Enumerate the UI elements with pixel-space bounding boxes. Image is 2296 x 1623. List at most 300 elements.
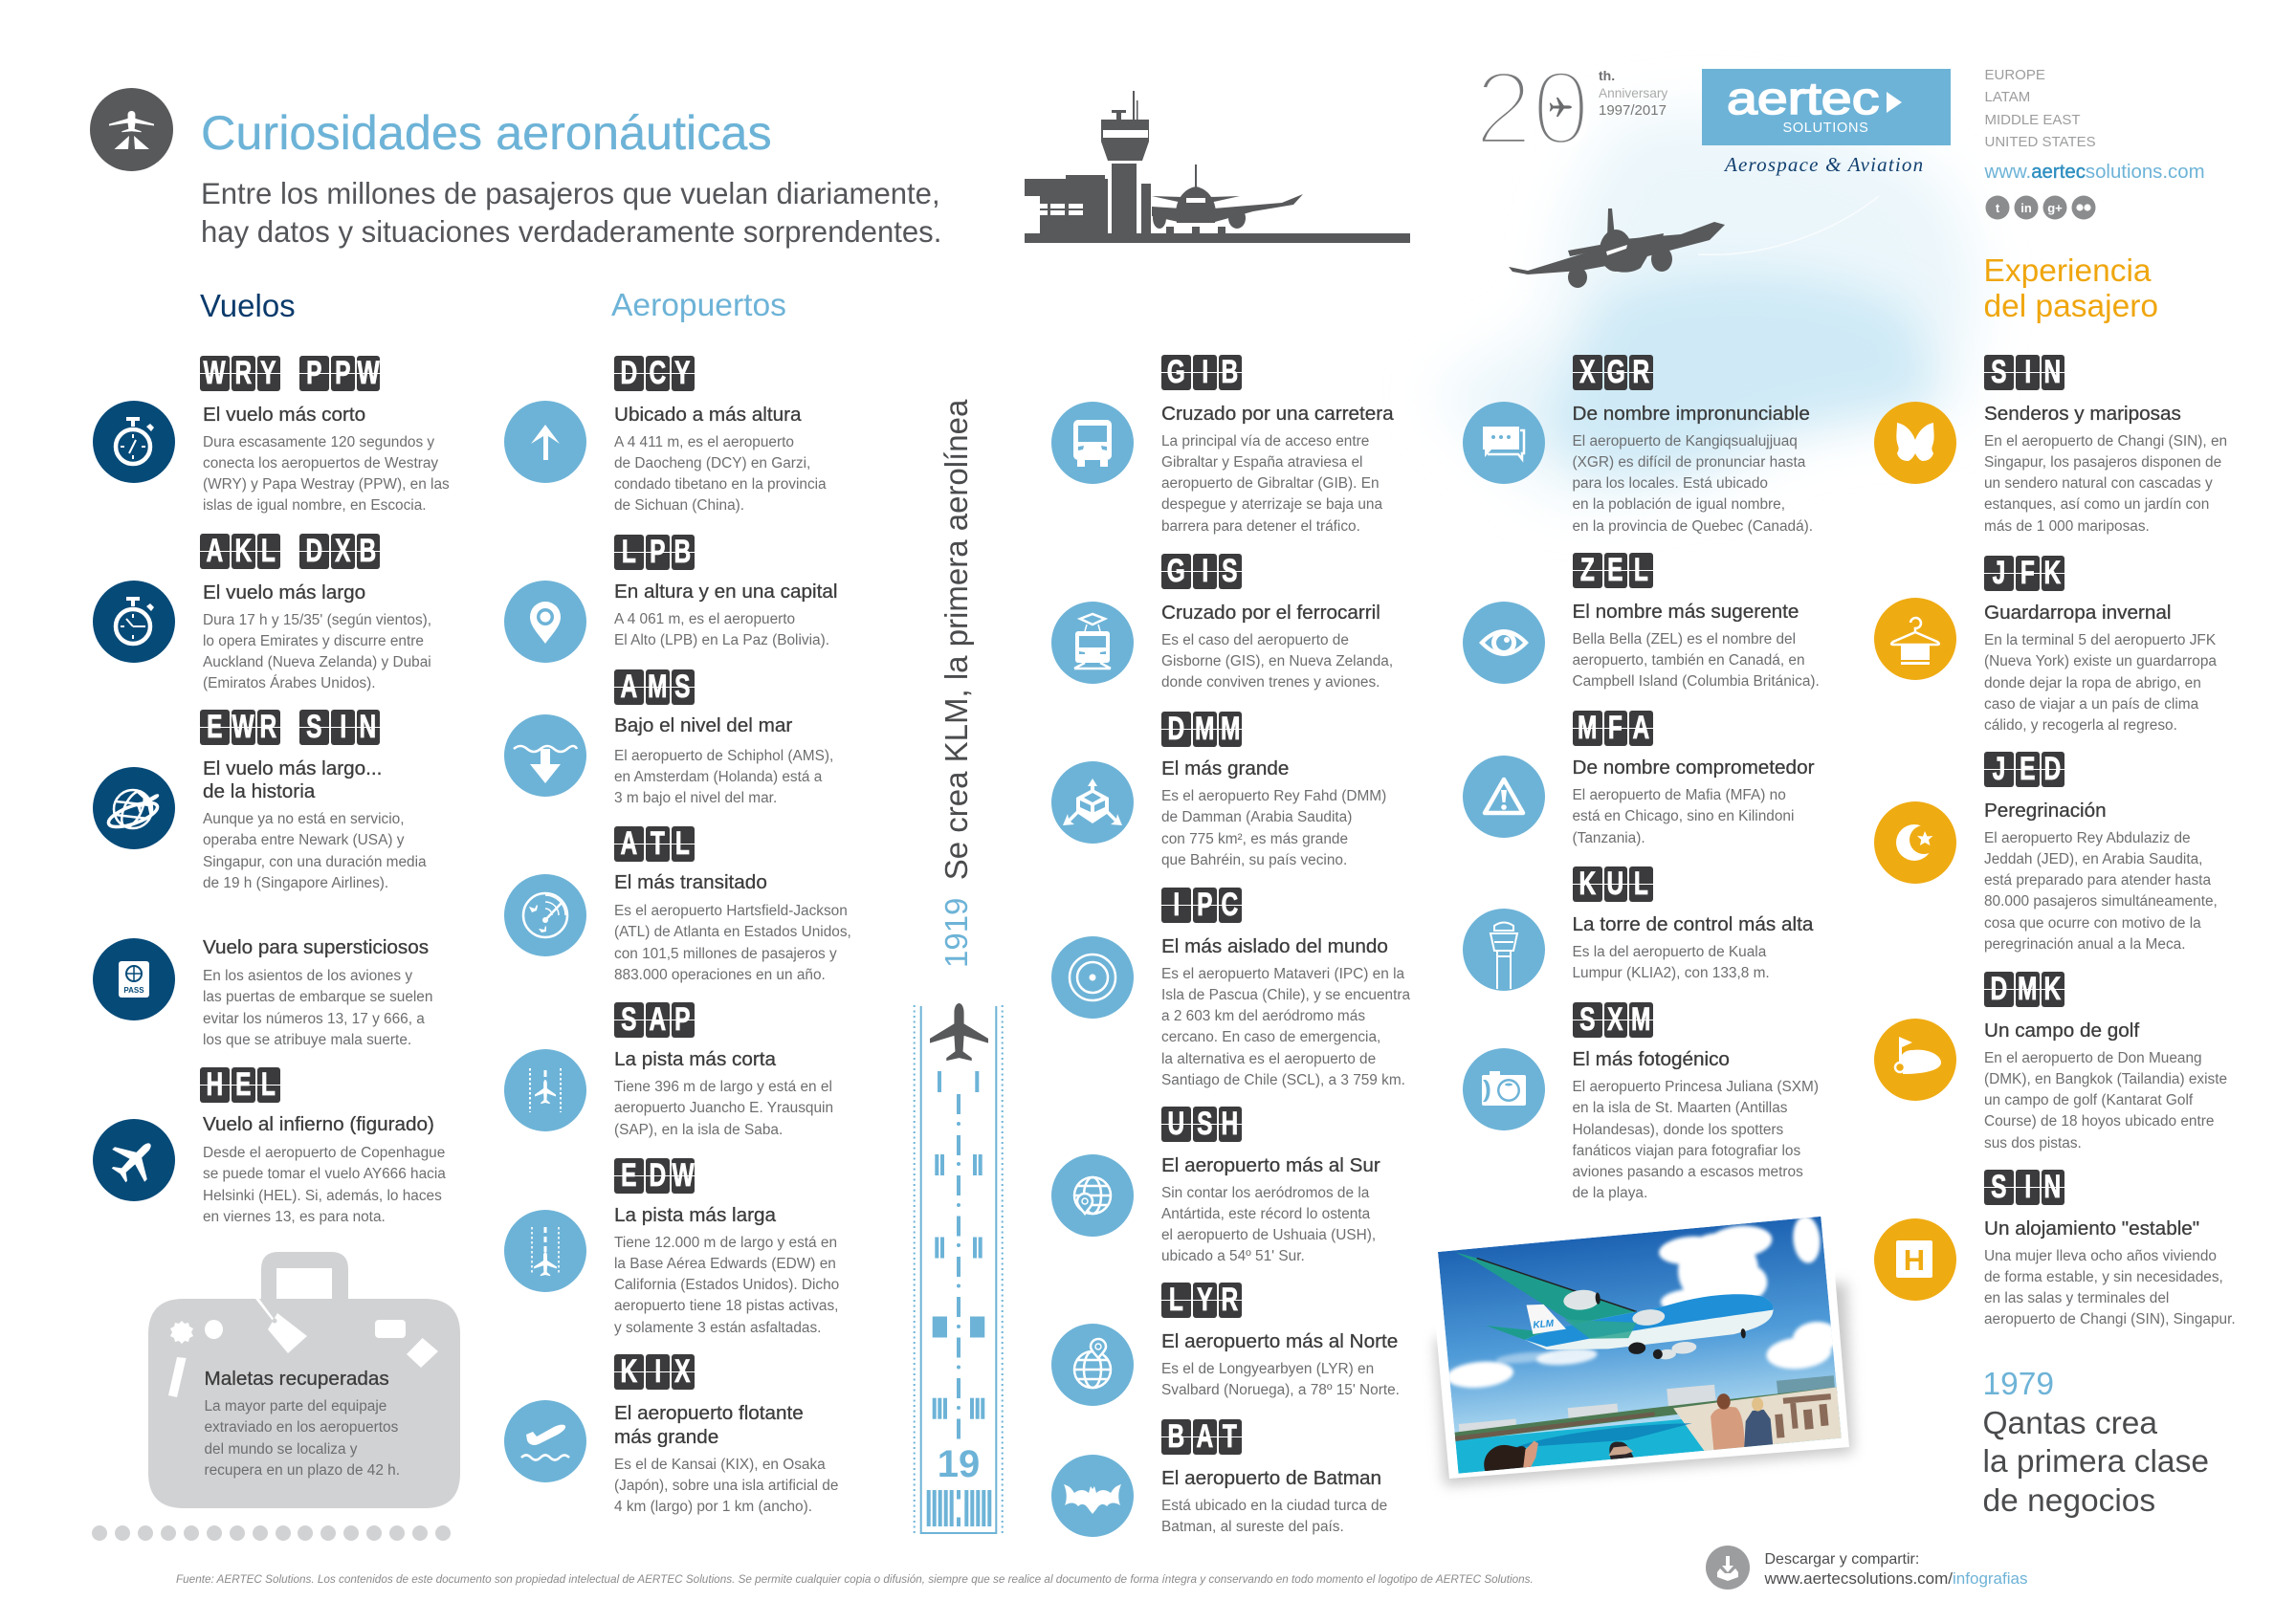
item: SAP: S	[621, 1002, 637, 1038]
illustration: control tower, terminal and parked plane	[1025, 91, 1410, 243]
heading: Experiencia del pasajero	[1984, 252, 2158, 323]
item: LPB: A 4 061 m, es el aeropuerto	[614, 611, 795, 627]
item: ZEL	[1463, 553, 1820, 692]
item: XGR: para los locales. Está ubicado	[1573, 475, 1768, 492]
item: GIB: despegue y aterrizaje se baja una	[1161, 496, 1382, 513]
number 20	[1474, 50, 1590, 167]
office regions: EUROPE	[1984, 67, 2045, 83]
item: JED: Peregrinación	[1984, 800, 2107, 821]
item: DCY: de Daocheng (DCY) en Garzi,	[614, 455, 810, 472]
heading: Experiencia del pasajero: Experiencia	[1984, 252, 2152, 289]
item: SIN alojamiento: N	[2044, 1170, 2062, 1205]
item: LYR: Es el de Longyearbyen (LYR) en	[1161, 1360, 1374, 1377]
item: XGR: en la población de igual nombre,	[1573, 496, 1785, 513]
item: BAT: El aeropuerto de Batman	[1161, 1467, 1381, 1488]
footnote: Fuente: AERTEC Solutions. Los contenidos de este documento son propiedad intelectual de AERTEC Solutions. Se permite cualquier copia o difusión, siempre que se realice al documento de forma íntegra y conservando en todo momento el logotipo de AERTEC Solutions.	[176, 1573, 1534, 1586]
item: KIX: Es el de Kansai (KIX), en Osaka	[614, 1456, 826, 1473]
item: DMK: un campo de golf (Kantarat Golf	[1984, 1092, 2193, 1108]
item: IPC: El más aislado del mundo	[1161, 935, 1388, 956]
item: JFK: F	[2020, 556, 2035, 591]
item: vuelo más corto: P	[335, 356, 350, 391]
item: JED: El aeropuerto Rey Abdulaziz de	[1984, 830, 2191, 845]
item: DCY: A 4 411 m, es el aeropuerto	[614, 434, 794, 450]
item: vuelo más largo de la historia	[93, 710, 427, 891]
social icons	[1986, 195, 2095, 220]
item: SIN mariposas: Singapur, los pasajeros disponen de	[1984, 454, 2221, 471]
item: MFA: M	[1578, 711, 1597, 746]
item: BAT: Batman, al sureste del país.	[1161, 1519, 1344, 1535]
item: vuelo más largo	[93, 534, 431, 691]
item: ATL: con 101,5 millones de pasajeros y	[614, 945, 837, 962]
item: GIS: Gisborne (GIS), en Nueva Zelanda,	[1161, 653, 1393, 669]
item: vuelo al infierno: E	[235, 1067, 251, 1102]
item: vuelo para supersticiosos: evitar los números 13, 17 y 666, a	[203, 1010, 425, 1027]
item: AMS: S	[675, 669, 691, 705]
item: SIN mariposas: más de 1 000 mariposas.	[1984, 518, 2150, 534]
item: GIB: G	[1167, 355, 1185, 390]
item: XGR: G	[1606, 355, 1624, 390]
item: JED: Jeddah (JED), en Arabia Saudita,	[1984, 851, 2202, 867]
item: JED: E	[2020, 752, 2035, 787]
item: ATL: T	[651, 826, 665, 862]
item: EDW: E	[621, 1157, 637, 1194]
item: GIB: B	[1222, 355, 1239, 390]
item: XGR: (XGR) es difícil de pronunciar hasta	[1573, 454, 1805, 471]
item: vuelo para supersticiosos: PASS	[123, 986, 144, 995]
item: ATL: L	[675, 826, 690, 862]
item: KIX: El aeropuerto flotante	[614, 1402, 804, 1423]
item: SXM: X	[1608, 1002, 1623, 1038]
item: vuelo más largo de la historia: de la historia	[203, 780, 315, 802]
item: DCY: condado tibetano en la provincia	[614, 476, 827, 493]
photo frame shadow	[1435, 1282, 1853, 1485]
item: SIN alojamiento: I	[2024, 1170, 2031, 1205]
item: KIX: I	[654, 1354, 661, 1390]
logo: aertec solutions	[1701, 69, 1950, 145]
item: vuelo más largo: A	[207, 534, 223, 569]
item: DMM: D	[1168, 712, 1184, 747]
photo plane	[1456, 1253, 1635, 1324]
item: SIN mariposas: En el aeropuerto de Changi (SIN), en	[1984, 432, 2227, 450]
item: KIX: (Japón), sobre una isla artificial de	[614, 1478, 838, 1494]
item: ATL: El más transitado	[614, 870, 767, 893]
item: SAP: (SAP), en la isla de Saba.	[614, 1121, 783, 1138]
item: IPC: P	[1197, 888, 1212, 923]
item: XGR: De nombre impronunciable	[1573, 402, 1810, 425]
item: vuelo más largo: X	[335, 534, 350, 569]
item: IPC: Es el aeropuerto Mataveri (IPC) en la	[1161, 966, 1404, 981]
suitcase illustration	[148, 1252, 460, 1508]
item: SXM	[1463, 1002, 1819, 1205]
item: XGR: X	[1579, 355, 1595, 390]
decorative dots row	[92, 1525, 451, 1541]
item: vuelo al infierno: Helsinki (HEL). Si, además, lo haces	[203, 1188, 442, 1203]
item: vuelo para supersticiosos	[93, 935, 432, 1048]
logo subtitle: SOLUTIONS	[1782, 121, 1869, 136]
callout: 1979 Qantas: 1979	[1982, 1367, 2054, 1402]
item: BAT: T	[1223, 1419, 1237, 1455]
photo beach	[1457, 1373, 1836, 1434]
item: vuelo más largo: L	[261, 534, 276, 569]
item: DCY: C	[649, 356, 666, 391]
item: BAT: A	[1196, 1419, 1213, 1455]
item: GIB: Gibraltar y España atraviesa el	[1161, 454, 1362, 471]
download text	[1764, 1550, 2027, 1590]
item: DMK: (DMK), en Bangkok (Tailandia) existe	[1984, 1071, 2227, 1087]
item: USH: Antártida, este récord lo ostenta	[1161, 1206, 1370, 1222]
item: LPB: B	[674, 535, 692, 570]
item: SXM: fanáticos viajan para fotografiar los	[1573, 1143, 1800, 1159]
item: vuelo más corto: W	[357, 356, 379, 391]
item: DCY: Ubicado a más altura	[614, 404, 801, 425]
item: AMS: El aeropuerto de Schiphol (AMS),	[614, 748, 833, 763]
item: LPB	[504, 535, 837, 663]
item: SXM: de la playa.	[1573, 1185, 1647, 1201]
logo word: aertec	[1726, 73, 1879, 123]
item: vuelo más largo: El vuelo más largo	[203, 581, 365, 603]
item: ATL: 883.000 operaciones en un año.	[614, 967, 826, 983]
panel: Maletas recuperadas	[148, 1252, 460, 1508]
item: IPC: la alternativa es el aeropuerto de	[1161, 1050, 1376, 1067]
item: DMK: M	[2018, 972, 2037, 1007]
item: GIB: La principal vía de acceso entre	[1161, 432, 1369, 450]
item: GIS: S	[1223, 554, 1238, 589]
runway plane	[930, 1003, 988, 1061]
item: SIN mariposas	[1874, 355, 2227, 537]
item: vuelo al infierno: H	[207, 1067, 223, 1102]
item: JFK: cálido, y recogerla al regreso.	[1984, 717, 2177, 734]
item: AMS: Bajo el nivel del mar	[614, 713, 792, 736]
anniversary text: 1997/2017	[1599, 102, 1667, 119]
item: SXM: M	[1631, 1002, 1650, 1038]
item: KUL: L	[1634, 866, 1648, 902]
item: DCY: D	[621, 356, 637, 391]
anniversary text	[1599, 68, 1668, 119]
item: KIX: 4 km (largo) por 1 km (ancho).	[614, 1499, 812, 1515]
item: vuelo más corto: Y	[261, 356, 276, 391]
item: vuelo más largo: B	[360, 534, 377, 569]
item: XGR: R	[1632, 355, 1649, 390]
item: GIB: I	[1202, 355, 1208, 390]
item: LYR: Svalbard (Noruega), a 78º 15' Norte.	[1161, 1382, 1400, 1398]
item: EDW: y solamente 3 están asfaltadas.	[614, 1320, 821, 1335]
item: GIS: Cruzado por el ferrocarril	[1161, 601, 1380, 624]
item: JFK: K	[2044, 556, 2062, 591]
item: EDW: la Base Aérea Edwards (EDW) en	[614, 1256, 836, 1272]
item: KUL	[1463, 866, 1813, 985]
icon: social circles	[1986, 195, 2095, 220]
item: LYR	[1051, 1283, 1400, 1406]
item: vuelo más largo de la historia: R	[260, 710, 277, 745]
item: vuelo al infierno: L	[261, 1067, 276, 1102]
icon: social circles: in	[2020, 201, 2031, 215]
item: MFA: (Tanzania).	[1573, 830, 1645, 845]
item: DMK: Un campo de golf	[1984, 1020, 2139, 1041]
logo arrow	[1887, 92, 1902, 113]
column: Experiencia del pasajero	[1874, 344, 2276, 1549]
item: GIB: barrera para detener el tráfico.	[1161, 518, 1360, 534]
item: SIN alojamiento: en las salas y terminales del	[1984, 1290, 2169, 1306]
item: DCY	[504, 356, 827, 514]
item: LPB: P	[650, 535, 665, 570]
item: vuelo más corto: islas de igual nombre, en Escocia.	[203, 497, 427, 514]
item: MFA: De nombre comprometedor	[1573, 757, 1814, 779]
item: KUL: U	[1607, 866, 1624, 902]
item: vuelo más largo de la historia: I	[340, 710, 346, 745]
item: KIX: X	[675, 1354, 691, 1390]
suitcase heading: Maletas recuperadas	[205, 1368, 389, 1390]
item: BAT	[1051, 1419, 1387, 1538]
column: Aeropuertos	[504, 356, 851, 1515]
item: vuelo al infierno: en viernes 13, es para nota.	[203, 1209, 386, 1225]
item: AMS: A	[621, 669, 637, 705]
item: ZEL: L	[1634, 553, 1648, 588]
item: XGR	[1463, 355, 1813, 537]
item: MFA	[1463, 711, 1814, 849]
subtitle: hay datos y situaciones verdaderamente sorprendentes.	[201, 215, 941, 249]
item: LPB: L	[622, 535, 636, 570]
item: GIS: donde conviven trenes y aviones.	[1161, 674, 1380, 691]
item: DCY: Y	[675, 356, 691, 391]
item: XGR: El aeropuerto de Kangiqsualujjuaq	[1573, 432, 1798, 450]
item: EDW: D	[649, 1157, 666, 1194]
callout: 1979 Qantas: de negocios	[1982, 1483, 2155, 1519]
item: USH	[1051, 1107, 1380, 1264]
item: EDW: W	[672, 1157, 694, 1194]
item: AMS	[504, 669, 833, 806]
item: AMS: 3 m bajo el nivel del mar.	[614, 790, 777, 806]
item: JED: cosa que ocurre con motivo de la	[1984, 914, 2201, 932]
callout: 1979 Qantas	[1982, 1366, 2209, 1522]
item: SAP	[504, 1002, 833, 1138]
item: SIN alojamiento	[1874, 1170, 2236, 1331]
item: IPC: I	[1173, 888, 1180, 923]
item: vuelo al infierno: Vuelo al infierno (figurado)	[203, 1113, 434, 1134]
item: IPC: Santiago de Chile (SCL), a 3 759 km.	[1161, 1072, 1405, 1088]
item: vuelo más corto: P	[306, 356, 322, 391]
item: DMM: con 775 km², es más grande	[1161, 830, 1348, 847]
item: EDW: aeropuerto tiene 18 pistas activas,	[614, 1298, 838, 1314]
item: vuelo más largo: D	[306, 534, 322, 569]
item: vuelo para supersticiosos: Vuelo para supersticiosos	[203, 935, 429, 958]
icon: social circles: g+	[2047, 201, 2063, 215]
item: IPC: a 2 603 km del aeródromo más	[1161, 1008, 1365, 1024]
item: DMM: M	[1195, 712, 1214, 747]
item: SAP: Tiene 396 m de largo y está en el	[614, 1079, 832, 1095]
item: vuelo más largo de la historia: S	[306, 710, 322, 745]
item: JED: está preparado para atender hasta	[1984, 872, 2211, 888]
item: SIN alojamiento: H	[1904, 1243, 1925, 1277]
item: SIN alojamiento: de forma estable, y sin necesidades,	[1984, 1269, 2223, 1285]
item: LPB: El Alto (LPB) en La Paz (Bolivia).	[614, 632, 829, 648]
item: vuelo al infierno: Desde el aeropuerto de Copenhague	[203, 1145, 445, 1161]
item: GIS: I	[1202, 554, 1208, 589]
runway illustration	[913, 1003, 1004, 1534]
item: JED: D	[2044, 752, 2062, 787]
item: SXM: en la isla de St. Maarten (Antillas	[1573, 1100, 1787, 1116]
office regions	[1984, 67, 2096, 150]
callout: 1979 Qantas: la primera clase	[1982, 1444, 2209, 1480]
item: DMK: En el aeropuerto de Don Mueang	[1984, 1050, 2202, 1065]
suitcase text	[205, 1398, 400, 1479]
item: SAP: A	[649, 1002, 666, 1038]
item: SIN mariposas: Senderos y mariposas	[1984, 402, 2181, 425]
item: IPC: cercano. En caso de emergencia,	[1161, 1029, 1380, 1045]
heading: Vuelos: Vuelos	[200, 288, 296, 323]
item: vuelo más corto: W	[204, 356, 226, 391]
item: vuelo más corto: R	[234, 356, 252, 391]
item: SAP: La pista más corta	[614, 1048, 776, 1070]
item: KIX: K	[621, 1354, 637, 1390]
item: IPC: Isla de Pascua (Chile), y se encuentra	[1161, 987, 1410, 1003]
item: JFK: (Nueva York) existe un guardarropa	[1984, 653, 2217, 669]
suitcase text: recupera en un plazo de 42 h.	[205, 1462, 400, 1479]
item: LYR: Y	[1197, 1283, 1212, 1318]
heading: Experiencia del pasajero: del pasajero	[1984, 289, 2158, 323]
item: SXM: aviones pasando a escasos metros	[1573, 1164, 1803, 1180]
item: vuelo para supersticiosos: los que se atribuye mala suerte.	[203, 1032, 411, 1048]
item: ATL: A	[621, 826, 637, 862]
item: DMK: Course) de 18 hoyos ubicado entre	[1984, 1113, 2214, 1130]
anniversary text: Anniversary	[1599, 86, 1667, 100]
subtitle: Entre los millones de pasajeros que vuelan diariamente,	[201, 177, 940, 210]
office regions: UNITED STATES	[1984, 134, 2096, 150]
item: SIN mariposas: S	[1991, 355, 2007, 390]
item: KUL: K	[1578, 866, 1596, 902]
item: ZEL: Campbell Island (Columbia Británica).	[1573, 673, 1820, 690]
column: airports, roads and extremes	[1051, 355, 1410, 1537]
download text: Descargar y compartir:	[1764, 1551, 1919, 1568]
heading: Aeropuertos: Aeropuertos	[611, 288, 786, 323]
item: ZEL: aeropuerto, también en Canadá, en	[1573, 652, 1805, 669]
item: SAP: aeropuerto Juancho E. Yrausquin	[614, 1100, 833, 1116]
item: vuelo más largo: K	[234, 534, 252, 569]
item: SXM: S	[1579, 1002, 1595, 1038]
item: vuelo más largo de la historia: operaba entre Newark (USA) y	[203, 832, 404, 848]
item: GIS: G	[1167, 554, 1185, 589]
item: SIN mariposas: un sendero natural con cascadas y	[1984, 475, 2213, 492]
item: JFK: Guardarropa invernal	[1984, 602, 2172, 624]
item: vuelo más largo de la historia: N	[360, 710, 377, 745]
website: www.aertecsolutions.com	[1984, 162, 2205, 183]
item: GIB: aeropuerto de Gibraltar (GIB). En	[1161, 475, 1380, 492]
item: vuelo más largo de la historia: Aunque ya no está en servicio,	[203, 811, 404, 827]
logo tagline: Aerospace & Aviation	[1725, 153, 1924, 176]
item: SIN mariposas: N	[2044, 355, 2062, 390]
photo: KLM plane over the beach: KLM	[1533, 1319, 1555, 1331]
column: curious names and towers	[1463, 344, 1845, 1549]
item: GIB	[1051, 355, 1394, 534]
item: AMS: en Amsterdam (Holanda) está a	[614, 769, 822, 785]
suitcase text: La mayor parte del equipaje	[205, 1398, 386, 1415]
item: KIX	[504, 1354, 838, 1515]
item: ATL	[504, 826, 851, 983]
icon: social circles: t	[1995, 201, 1999, 215]
item: vuelo más largo de la historia: W	[232, 710, 254, 745]
item: DMK	[1874, 972, 2227, 1154]
item: DCY: de Sichuan (China).	[614, 497, 744, 514]
item: JFK: En la terminal 5 del aeropuerto JFK	[1984, 632, 2216, 648]
item: ZEL: El nombre más sugerente	[1573, 601, 1799, 622]
item: IPC: C	[1222, 888, 1239, 923]
download text: www.aertecsolutions.com/infografias	[1764, 1569, 2027, 1588]
item: vuelo más corto	[93, 356, 450, 514]
item: MFA: está en Chicago, sino en Kilindoni	[1573, 808, 1794, 824]
item: vuelo más corto: El vuelo más corto	[203, 404, 365, 425]
item: vuelo más largo: (Emiratos Árabes Unidos).	[203, 675, 375, 691]
item: SXM: El más fotogénico	[1573, 1048, 1730, 1070]
item: EDW: Tiene 12.000 m de largo y está en	[614, 1234, 837, 1251]
item: MFA: F	[1608, 711, 1623, 746]
vertical headline: 1919 Se crea KLM, la primera aerolínea	[938, 400, 974, 968]
item: ZEL: Bella Bella (ZEL) es el nombre del	[1573, 631, 1796, 647]
item: ZEL: Z	[1580, 553, 1594, 588]
item: BAT: Está ubicado en la ciudad turca de	[1161, 1498, 1387, 1513]
runway number: 19	[938, 1443, 980, 1485]
item: LPB: En altura y en una capital	[614, 581, 837, 603]
item: KUL: La torre de control más alta	[1573, 913, 1813, 935]
item: SIN alojamiento: Una mujer lleva ocho años viviendo	[1984, 1247, 2217, 1264]
item: vuelo más largo de la historia: Singapur, con una duración media	[203, 853, 427, 870]
item: JFK	[1874, 556, 2217, 736]
illustration: plane taking off	[1509, 208, 1725, 288]
item: DMK: K	[2044, 972, 2062, 1007]
item: GIS	[1051, 554, 1393, 691]
item: SIN alojamiento: aeropuerto de Changi (SIN), Singapur.	[1984, 1311, 2236, 1327]
item: JFK: J	[1993, 556, 2005, 591]
item: vuelo al infierno: se puede tomar el vuelo AY666 hacia	[203, 1166, 446, 1182]
item: DMM: de Damman (Arabia Saudita)	[1161, 809, 1352, 825]
item: JED: peregrinación anual a la Meca.	[1984, 936, 2185, 953]
item: vuelo más largo de la historia: de 19 h (Singapore Airlines).	[203, 875, 388, 891]
item: USH: El aeropuerto más al Sur	[1161, 1153, 1380, 1176]
item: USH: U	[1168, 1107, 1184, 1142]
item: GIS: Es el caso del aeropuerto de	[1161, 631, 1349, 648]
item: MFA: A	[1632, 711, 1649, 746]
item: DMK: D	[1991, 972, 2007, 1007]
item: LYR: El aeropuerto más al Norte	[1161, 1329, 1398, 1352]
item: USH: el aeropuerto de Ushuaia (USH),	[1161, 1227, 1376, 1243]
item: USH: H	[1222, 1107, 1239, 1142]
item: JED: J	[1993, 752, 2005, 787]
item: LYR: R	[1222, 1283, 1239, 1318]
title: Curiosidades aeronáuticas	[201, 105, 772, 160]
item: KIX: más grande	[614, 1425, 718, 1448]
item: EDW: California (Estados Unidos). Dicho	[614, 1277, 839, 1293]
callout: 1979 Qantas: Qantas crea	[1982, 1406, 2157, 1441]
item: DMM: Es el aeropuerto Rey Fahd (DMM)	[1161, 788, 1386, 804]
icon: header plane on runway	[90, 88, 173, 171]
number 20: 2	[1474, 50, 1533, 167]
item: SIN alojamiento: Un alojamiento "estable"	[1984, 1217, 2199, 1239]
item: ATL: Es el aeropuerto Hartsfield-Jackson	[614, 903, 848, 919]
item: BAT: B	[1168, 1419, 1184, 1455]
item: KUL: Es la del aeropuerto de Kuala	[1573, 944, 1766, 960]
item: vuelo más largo: Dura 17 h y 15/35' (según vientos),	[203, 612, 431, 627]
icon: download	[1706, 1546, 1750, 1590]
item: vuelo para supersticiosos: En los asientos de los aviones y	[203, 968, 412, 984]
item: USH: Sin contar los aeródromos de la	[1161, 1184, 1369, 1201]
item: ATL: (ATL) de Atlanta en Estados Unidos,	[614, 924, 851, 940]
item: SXM: El aeropuerto Princesa Juliana (SXM)	[1573, 1079, 1819, 1095]
number 20: 0	[1532, 50, 1590, 167]
suitcase text: extraviado en los aeropuertos	[205, 1419, 398, 1436]
anniversary badge	[1474, 50, 1668, 167]
item: DMM: El más grande	[1161, 757, 1289, 779]
item: vuelo más corto: (WRY) y Papa Westray (PPW), en las	[203, 476, 450, 493]
item: KUL: Lumpur (KLIA2), con 133,8 m.	[1573, 965, 1770, 981]
item: USH: ubicado a 54º 51' Sur.	[1161, 1248, 1305, 1264]
